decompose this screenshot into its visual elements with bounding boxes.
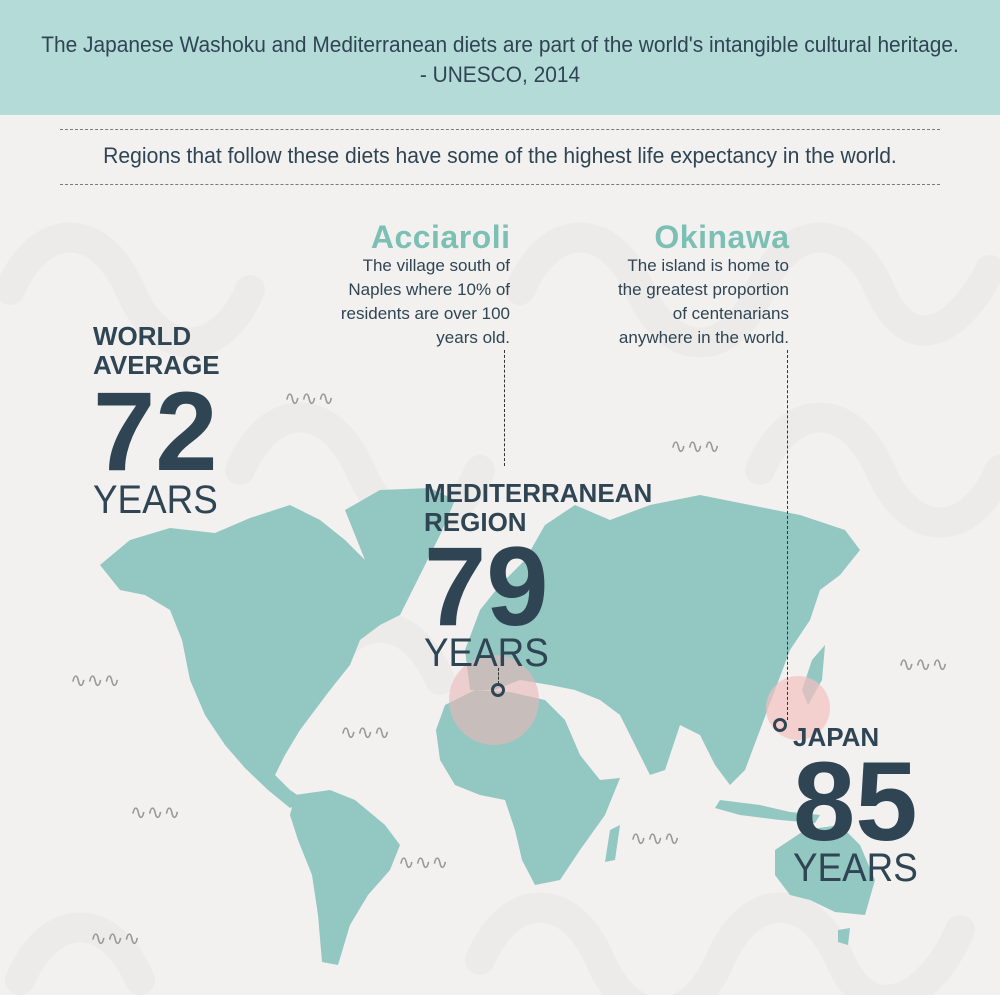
text: ∿∿∿ [90,928,140,950]
stat: mediterranean: 79 [424,524,549,649]
indonesia [715,800,820,823]
text: ∿∿∿ [398,852,448,874]
subtitle: Regions that follow these diets have some of the highest life expectancy in the world. [103,143,897,168]
callout: Okinawa [618,219,790,347]
stat: world average [93,321,220,522]
callout: Okinawa: of centenarians [673,304,789,323]
header banner [0,0,1000,115]
callout: Acciaroli: The village south of [363,256,510,275]
pink highlights [449,655,539,745]
text: ∿∿∿ [630,828,680,850]
stat: japan: YEARS [793,846,918,890]
callout: Okinawa: the greatest proportion [618,280,789,299]
callout: Okinawa: The island is home to [627,256,789,275]
text: ∿∿∿ [70,670,120,692]
madagascar [605,825,620,862]
callout: Acciaroli [341,219,510,347]
north america [100,505,400,808]
stat: mediterranean [424,478,652,675]
text: ∿∿∿ [898,654,948,676]
callout: Acciaroli: residents are over 100 [341,304,510,323]
callout: Acciaroli: Acciaroli [371,219,510,255]
markers [491,683,505,697]
eurasia [465,495,860,785]
callout: Okinawa: anywhere in the world. [619,328,789,347]
callout: Acciaroli: years old. [436,328,510,347]
dashed leader lines [504,350,505,466]
stat: mediterranean: MEDITERRANEAN [424,478,652,508]
stat: world average: AVERAGE [93,350,220,380]
quote text [41,32,959,87]
quote text: - UNESCO, 2014 [420,62,580,87]
south america [290,790,400,965]
stat: japan: 85 [793,739,918,864]
callout: Acciaroli: Naples where 10% of [348,280,510,299]
text: ∿∿∿ [130,802,180,824]
text: ∿∿∿ [340,722,390,744]
quote text: The Japanese Washoku and Mediterranean diets are part of the world's intangible cultural heritage. [41,32,959,57]
text: ∿∿∿ [670,436,720,458]
stat: world average: YEARS [93,478,218,522]
stat: japan: JAPAN [793,722,879,752]
stat: mediterranean: REGION [424,507,527,537]
callout: Okinawa: Okinawa [654,219,790,255]
australia [775,825,875,915]
small squiggles: ∿∿∿ [284,388,334,410]
africa [436,690,620,885]
stat: world average: 72 [93,369,218,494]
stat: world average: WORLD [93,321,191,351]
greenland [345,488,455,615]
japan [802,645,825,705]
stat: mediterranean: YEARS [424,631,549,675]
